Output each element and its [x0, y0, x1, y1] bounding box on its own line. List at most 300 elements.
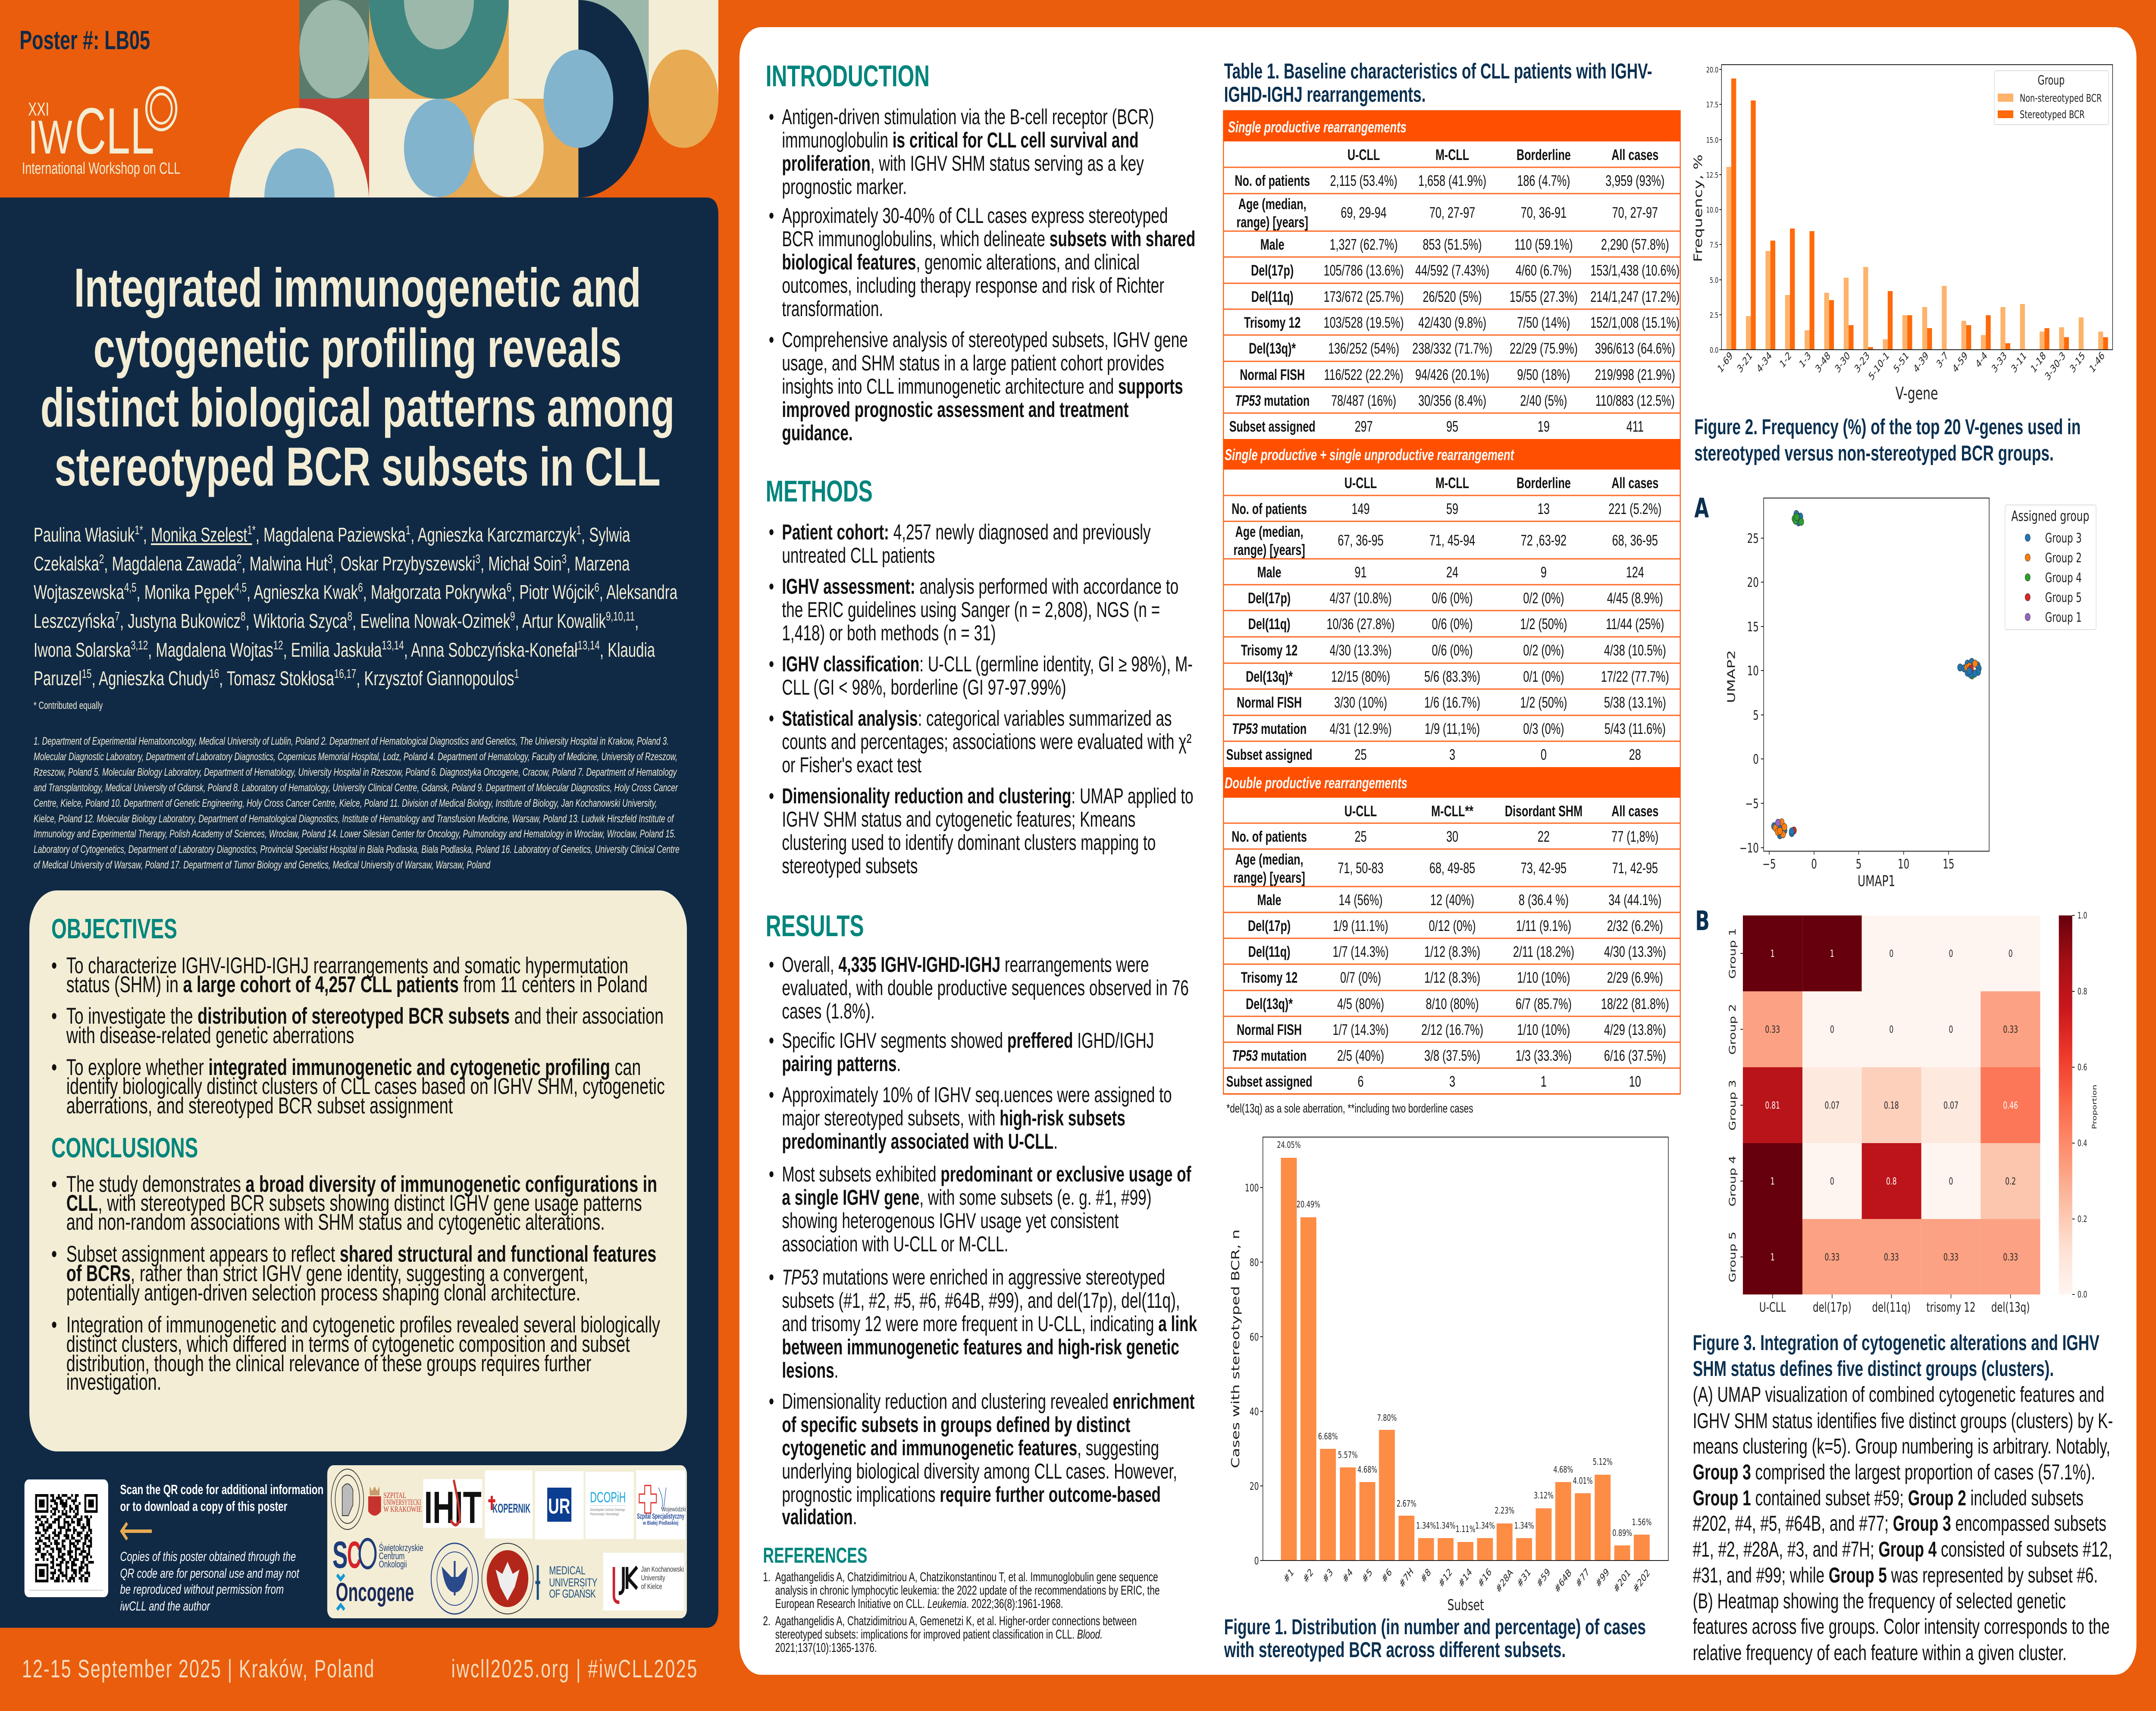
authors: , Agnieszka Chudy — [91, 667, 210, 689]
table section: single productive + single unproductive: 4/45 (8.9%) — [1607, 589, 1663, 607]
table section: single productive + single unproductive: 3/30 (10%) — [1334, 694, 1387, 711]
table section: double productive: 4/5 (80%) — [1337, 995, 1384, 1012]
table section: double productive: 1/12 (8.3%) — [1424, 943, 1480, 960]
cell values: 0.07 — [1825, 1100, 1839, 1111]
table section: double productive: Normal FISH — [1237, 1021, 1302, 1038]
introduction text: • — [769, 204, 774, 228]
table section: double productive: 4/30 (13.3%) — [1604, 943, 1666, 960]
reference list: Agathangelidis A, Chatzidimitriou A, Gemenetzi K, et al. Higher-order connections between — [775, 1614, 1137, 1628]
introduction text: Approximately 30-40% of CLL cases express stereotyped — [782, 204, 1168, 228]
chart: UMAP scatter: 0 — [1811, 857, 1817, 872]
affiliations: of Medical University of Warsaw, Poland 17. Department of Tumor Biology and Genetics, Medical University of Warsaw, Warsaw, Poland — [34, 859, 491, 871]
y axis ticks: 100 — [1245, 1182, 1259, 1194]
color bar: Proportion — [2091, 1084, 2098, 1129]
table section: single productive + single unproductive: Borderline — [1517, 474, 1571, 492]
color bar: 1.0 — [2078, 911, 2087, 921]
table section: double productive: M-CLL** — [1431, 802, 1473, 820]
title: distinct biological patterns among — [41, 377, 674, 439]
chart: UMAP scatter: 5 — [1856, 857, 1861, 872]
table section: single productive + single unproductive: 1/6 (16.7%) — [1424, 694, 1480, 711]
y axis title: Cases with stereotyped BCR, n — [1229, 1229, 1242, 1468]
cell values: 0 — [2009, 948, 2013, 959]
logo: IHIT: IHIT — [424, 1483, 482, 1533]
authors: 1 — [514, 667, 519, 681]
x axis ticks: #5 — [1360, 1566, 1374, 1585]
color bar: 0.4 — [2078, 1139, 2087, 1149]
authors: 13,14 — [382, 639, 404, 652]
results text: pairing patterns. — [782, 1052, 901, 1076]
x axis ticks: 3-23 — [1853, 349, 1871, 376]
table section: single productive: 3,959 (93%) — [1605, 172, 1664, 189]
x axis ticks: 4-34 — [1755, 349, 1774, 376]
table section: single productive + single unproductive: M-CLL — [1435, 474, 1469, 492]
table section: single productive: 297 — [1355, 418, 1373, 435]
authors: 15 — [82, 667, 91, 681]
legend: Group 2 — [2045, 551, 2082, 566]
table section: double productive: 10 — [1629, 1073, 1641, 1090]
percent labels — [1277, 1141, 1651, 1539]
results text: Overall, 4,335 IGHV-IGHD-IGHJ rearrangements were — [782, 953, 1149, 977]
authors: 4,5 — [234, 581, 247, 595]
results text: a single IGHV gene, with some subsets (e. g. #1, #99) — [782, 1186, 1151, 1210]
x axis ticks: #7H — [1398, 1566, 1415, 1590]
table section: single productive: No. of patients — [1235, 172, 1310, 189]
affiliations: Centre, Kielce, Poland 10. Department of Genetic Engineering, Holy Cross Cancer Centre, Kielce, Poland 11. Division of Medical Biology, Institute of Biology, Jan Kochanowski University, — [34, 797, 657, 809]
methods text: IGHV SHM status and cytogenetic features; Kmeans — [782, 808, 1135, 832]
x axis ticks: 5-51 — [1892, 349, 1911, 376]
x axis ticks: 3-11 — [2010, 349, 2028, 376]
authors: , Marzena — [567, 552, 630, 575]
logo: iwCLL: IW — [28, 111, 72, 164]
y axis ticks: 7.5 — [1710, 241, 1718, 250]
column labels: del(17p) — [1813, 1300, 1852, 1315]
objectives list: • — [51, 953, 57, 978]
color bar: 0.8 — [2078, 987, 2087, 997]
axis labels: 25 — [1747, 531, 1759, 546]
results text: major stereotyped subsets, with high-risk subsets — [782, 1106, 1125, 1131]
table section: single productive: Age (median, — [1238, 195, 1307, 213]
copyright note: iwCLL and the author — [120, 1598, 210, 1614]
methods text: IGHV assessment: analysis performed with accordance to — [782, 575, 1178, 599]
authors: Iwona Solarska — [34, 639, 131, 661]
x axis ticks: #4 — [1341, 1566, 1354, 1585]
results text: association with U-CLL or M-CLL. — [782, 1232, 1008, 1257]
table section: single productive: 78/487 (16%) — [1331, 392, 1396, 409]
table section: single productive + single unproductive: 91 — [1354, 564, 1366, 581]
results text — [769, 953, 1197, 1529]
table section: double productive: 12 (40%) — [1430, 891, 1474, 909]
authors: 6 — [507, 581, 511, 595]
objectives list: status (SHM) in a large cohort of 4,257 CLL patients from 11 centers in Poland — [66, 971, 648, 997]
logo: Szpital Uniwersytecki: UNIWERSYTECKI — [383, 1498, 421, 1507]
icon: arrow — [122, 1523, 152, 1539]
percent labels: 1.34% — [1475, 1521, 1495, 1531]
table section: single productive: 116/522 (22.2%) — [1324, 366, 1404, 383]
logo: UJK: Jan Kochanowski — [641, 1565, 684, 1574]
table section: single productive + single unproductive: 0 — [1541, 746, 1547, 763]
table section: single productive: 110 (59.1%) — [1514, 236, 1573, 253]
authors: 9 — [510, 610, 515, 624]
y axis ticks: 15.0 — [1706, 136, 1718, 145]
table section: double productive: 2/5 (40%) — [1337, 1047, 1384, 1064]
authors: 2 — [237, 552, 241, 566]
table section: single productive: 19 — [1538, 418, 1550, 435]
cell values: 0 — [1830, 1176, 1834, 1187]
x axis title: V-gene — [1896, 384, 1938, 404]
x axis ticks: #31 — [1515, 1566, 1532, 1590]
title: Integrated immunogenetic and — [74, 257, 641, 319]
table section: double productive: 34 (44.1%) — [1608, 891, 1661, 909]
table section: single productive + single unproductive: 13 — [1538, 500, 1550, 517]
logo: Medical University of Gdansk: MEDICAL — [549, 1564, 586, 1577]
authors: 1 — [406, 523, 411, 537]
table section: single productive: 153/1,438 (10.6%) — [1590, 262, 1680, 279]
table section: double productive: 3/8 (37.5%) — [1424, 1047, 1480, 1064]
logo: UJK: of Kielce — [641, 1583, 662, 1591]
results text: predominantly associated with U-CLL. — [782, 1130, 1058, 1154]
legend: Assigned group — [2011, 508, 2089, 524]
x axis ticks: #77 — [1574, 1566, 1591, 1590]
table section: double productive: 6 — [1357, 1073, 1363, 1090]
table section: double productive: Del(17p) — [1248, 917, 1291, 934]
objectives list: To investigate the distribution of stereotyped BCR subsets and their association — [66, 1003, 664, 1029]
logo: DCOPiH: Pulmonologii i Hematologii — [590, 1513, 619, 1516]
chart: UMAP scatter: 15 — [1943, 857, 1954, 872]
table section: double productive: Disordant SHM — [1505, 802, 1583, 820]
percent labels: 4.68% — [1553, 1465, 1573, 1475]
y axis ticks: 2.5 — [1710, 311, 1718, 320]
authors: 9,10,11 — [606, 610, 635, 624]
introduction text: proliferation, with IGHV SHM status serving as a key — [782, 152, 1144, 176]
results text: and trisomy 12 were more frequent in U-CLL, indicating a link — [782, 1312, 1197, 1336]
x axis ticks: #8 — [1419, 1566, 1432, 1585]
table section: double productive: 4/29 (13.8%) — [1604, 1021, 1666, 1038]
x axis ticks: 4-59 — [1951, 349, 1970, 376]
table section: single productive: U-CLL — [1348, 146, 1380, 163]
table section: double productive: 30 — [1446, 828, 1458, 845]
cell values: 0 — [1949, 948, 1953, 959]
authors: , Klaudia — [600, 639, 655, 661]
table section: single productive: 70, 36-91 — [1521, 204, 1567, 221]
table section: single productive + single unproductive: range) [years] — [1233, 541, 1305, 558]
axis labels: 20 — [1747, 575, 1759, 590]
chart: UMAP scatter: UMAP1 — [1858, 873, 1895, 890]
logo: Medical University of Gdansk — [535, 1564, 598, 1600]
section: methods — [766, 474, 1194, 878]
table section: double productive: 71, 42-95 — [1612, 859, 1658, 877]
table section: single productive + single unproductive: 0/3 (0%) — [1523, 720, 1564, 737]
x axis ticks: #202 — [1631, 1567, 1651, 1595]
table section: single productive: Del(11q) — [1251, 288, 1294, 305]
table section: single productive: 853 (51.5%) — [1423, 236, 1482, 253]
x axis ticks: 3-21 — [1736, 349, 1754, 376]
logo: Szpital Specjalistyczny: Wojewódzki — [661, 1505, 686, 1513]
table section: single productive: 105/786 (13.6%) — [1324, 262, 1404, 279]
partner logos — [327, 1465, 687, 1618]
table section: single productive + single unproductive: 0/6 (0%) — [1432, 589, 1473, 607]
percent labels: 3.12% — [1534, 1491, 1554, 1501]
table section: single productive: 152/1,008 (15.1%) — [1590, 314, 1680, 331]
table section: single productive: Single productive rearrangements — [1228, 119, 1407, 136]
results text: validation. — [782, 1505, 857, 1529]
table section: single productive + single unproductive: Del(11q) — [1248, 615, 1291, 633]
table section: double productive: 22 — [1538, 828, 1550, 845]
y axis ticks — [1706, 66, 1718, 355]
table section: single productive: 136/252 (54%) — [1328, 340, 1399, 357]
table section: single productive: 2/40 (5%) — [1520, 392, 1567, 409]
section: references — [763, 1544, 1159, 1655]
table section: single productive + single unproductive — [1225, 446, 1669, 763]
objectives list: identify biologically distinct clusters of CLL cases based on IGHV SHM, cytogenetic — [66, 1073, 665, 1099]
table section: single productive + single unproductive: Subset assigned — [1226, 746, 1313, 763]
authors: 8 — [348, 610, 352, 624]
table section: single productive + single unproductive: All cases — [1611, 474, 1658, 492]
caption: figure 3: relative frequency of each feature within a given cluster. — [1693, 1641, 2067, 1665]
conclusions list: potentially antigen-driven selection process shaping clonal architecture. — [66, 1280, 580, 1306]
reference list: stereotyped subsets: implications for improved patient classification in CLL. Blood. — [775, 1628, 1103, 1642]
results text: Dimensionality reduction and clustering revealed enrichment — [782, 1390, 1194, 1414]
table section: double productive: 77 (1,8%) — [1611, 828, 1658, 845]
x axis ticks: #12 — [1437, 1566, 1454, 1590]
results text: prognostic implications require further outcome-based — [782, 1483, 1161, 1507]
row labels: Group 1 — [1727, 928, 1738, 979]
introduction text: BCR immunoglobulins, which delineate subsets with shared — [782, 227, 1195, 251]
objectives list: • — [51, 1003, 57, 1029]
x axis ticks: 4-4 — [1974, 349, 1989, 371]
conclusions list: investigation. — [66, 1369, 161, 1395]
caption: figure 3: features across five groups. Color intensity corresponds to the — [1693, 1615, 2110, 1639]
logo: medal — [331, 1469, 364, 1529]
chart: UMAP scatter: 10 — [1898, 857, 1909, 872]
caption: figure 3: #31, and #99; while Group 5 was represented by subset #6. — [1693, 1564, 2098, 1588]
authors: , Krzysztof Giannopoulos — [356, 667, 514, 689]
copyright note: QR code are for personal use and may not — [120, 1566, 300, 1581]
table section: double productive: Subset assigned — [1226, 1073, 1313, 1090]
y axis ticks: 12.5 — [1706, 171, 1718, 180]
authors: , — [635, 610, 639, 632]
methods text: CLL (GI < 98%, borderline (GI 97-97.99%) — [782, 676, 1066, 700]
table section: single productive + single unproductive: 59 — [1446, 500, 1458, 517]
x axis ticks: #201 — [1612, 1567, 1632, 1595]
x axis title: Subset — [1448, 1597, 1484, 1614]
table title — [1224, 60, 1652, 107]
table: baseline characteristics — [1223, 111, 1680, 1094]
results text: • — [769, 1163, 774, 1187]
table section: single productive + single unproductive: 0/6 (0%) — [1432, 615, 1473, 633]
introduction text: Antigen-driven stimulation via the B-cell receptor (BCR) — [782, 105, 1154, 129]
table section: double productive: Age (median, — [1235, 851, 1304, 868]
table section: single productive: 69, 29-94 — [1341, 204, 1387, 221]
axis labels — [1739, 531, 1759, 856]
table section: single productive + single unproductive: U-CLL — [1344, 474, 1377, 492]
axis labels: −10 — [1739, 841, 1759, 856]
title: stereotyped BCR subsets in CLL — [54, 436, 661, 498]
x axis ticks: 1-3 — [1798, 349, 1813, 371]
introduction text: insights into CLL immunogenetic architecture and supports — [782, 375, 1183, 399]
logo: UR: UR — [548, 1495, 570, 1519]
bars: non-stereotyped — [1727, 167, 2103, 350]
table section: double productive: 1 — [1541, 1073, 1547, 1090]
authors: , Magdalena Zawada — [104, 552, 237, 575]
logo: Oncogene: Oncogene — [336, 1578, 414, 1607]
results text: TP53 mutations were enriched in aggressive stereotyped — [782, 1266, 1165, 1290]
authors: , Monika Szelest — [143, 523, 247, 546]
affiliations: and Transplantology, Medical University of Gdansk, Poland 8. Laboratory of Hematology, University Clinical Centre, Gdansk, Poland 9. Department of Molecular Diagnostics, Holy Cross Cancer — [34, 782, 678, 794]
methods text: clustering used to identify dominant clusters mapping to — [782, 831, 1156, 855]
caption: figure 3: #1, #2, #28A, #3, and #7H; Group 4 consisted of subsets #12, — [1693, 1538, 2112, 1562]
table section: double productive: 8/10 (80%) — [1426, 995, 1479, 1012]
axis labels: 15 — [1747, 620, 1759, 635]
methods text — [769, 520, 1194, 878]
table section: single productive: 1,327 (62.7%) — [1330, 236, 1398, 253]
heading: methods: METHODS — [766, 474, 873, 508]
objectives list: To characterize IGHV-IGHD-IGHJ rearrangements and somatic hypermutation — [66, 953, 628, 978]
caption: figure 2 — [1694, 415, 2081, 466]
table section: single productive + single unproductive: 28 — [1629, 746, 1641, 763]
authors: , Agnieszka Kwak — [247, 581, 358, 603]
legend: Group — [2038, 73, 2065, 88]
introduction text: biological features, genomic alterations, and clinical — [782, 251, 1140, 275]
authors: , Sylwia — [581, 523, 630, 546]
cell values: 1 — [1830, 948, 1834, 959]
logo: SCO — [332, 1534, 423, 1576]
logo: SCO: Świętokrzyskie — [379, 1542, 423, 1554]
table section: double productive: Male — [1257, 891, 1282, 909]
table section: double productive: Trisomy 12 — [1241, 969, 1297, 986]
caption: figure 1 — [1224, 1615, 1646, 1662]
table frame and section bars — [1223, 111, 1680, 1094]
legend: Group 1 — [2045, 610, 2082, 625]
objectives list: • — [51, 1054, 57, 1080]
cell values: 0.33 — [1765, 1024, 1780, 1035]
table section: double productive: 73, 42-95 — [1521, 859, 1567, 877]
table section: single productive: 2,290 (57.8%) — [1601, 236, 1669, 253]
table section: single productive: Subset assigned — [1229, 418, 1316, 435]
panel label B: B — [1695, 905, 1710, 937]
logo: Szpital Specjalistyczny: Szpital Specjalistyczny — [637, 1512, 684, 1521]
methods text: the ERIC guidelines using Sanger (n = 2,808), NGS (n = — [782, 598, 1160, 622]
authors: Wojtaszewska — [34, 581, 124, 603]
heading: introduction: INTRODUCTION — [766, 59, 930, 93]
x axis ticks: #3 — [1321, 1566, 1335, 1585]
conclusions list: Integration of immunogenetic and cytogenetic profiles revealed several biologically — [66, 1312, 660, 1338]
y axis ticks: 40 — [1250, 1406, 1259, 1418]
table section: double productive: range) [years] — [1233, 869, 1305, 886]
x axis ticks: 1-18 — [2029, 349, 2048, 376]
introduction text: outcomes, including therapy response and risk of Richter — [782, 274, 1164, 298]
table section: single productive: 94/426 (20.1%) — [1415, 366, 1489, 383]
table section: double productive: 18/22 (81.8%) — [1601, 995, 1669, 1012]
x axis ticks — [1282, 1566, 1651, 1595]
table section: single productive + single unproductive: 0/2 (0%) — [1523, 642, 1564, 659]
caption: figure 3: IGHV SHM status identifies five distinct groups (clusters) by K- — [1693, 1409, 2113, 1433]
authors: 1* — [247, 523, 256, 537]
table section: double productive: 1/7 (14.3%) — [1332, 943, 1388, 960]
x axis ticks: #14 — [1457, 1566, 1474, 1590]
results text: • — [769, 1390, 774, 1414]
table section: double productive: Del(11q) — [1248, 943, 1291, 960]
reference list: 2. — [763, 1614, 771, 1628]
table section: double productive: 1/7 (14.3%) — [1332, 1021, 1388, 1038]
cell values: 0.33 — [1825, 1252, 1839, 1263]
table section: double productive: 3 — [1449, 1073, 1455, 1090]
logo: Warsaw medical university — [482, 1543, 533, 1614]
legend — [1994, 71, 2109, 125]
x axis ticks: 1-46 — [2088, 349, 2106, 376]
authors: , Emilia Jaskuła — [283, 639, 382, 661]
table section: single productive + single unproductive: Normal FISH — [1237, 694, 1302, 711]
table section: single productive + single unproductive: 149 — [1351, 500, 1369, 517]
affiliations: Laboratory of Cytogenetics, Department of Laboratory Diagnostics, Provincial Specialist Hospital in Biala Podlaska, Biala Podlaska, Poland 16. Laboratory of Genetics, University Clinical Centre — [34, 843, 680, 856]
cell values: 0.33 — [2003, 1024, 2018, 1035]
x axis ticks: 3-30-3 — [2043, 349, 2067, 383]
axis labels: 0 — [1753, 752, 1759, 767]
legend: Stereotyped BCR — [2020, 109, 2085, 121]
authors: 6 — [358, 581, 363, 595]
legend: Group 4 — [2045, 570, 2082, 586]
results text: • — [769, 1029, 774, 1053]
table section: single productive + single unproductive: 71, 45-94 — [1429, 532, 1475, 549]
objectives list: aberrations, and stereotyped BCR subset assignment — [66, 1093, 453, 1119]
legend: Group 3 — [2045, 531, 2082, 546]
table section: single productive: 396/613 (64.6%) — [1595, 340, 1675, 357]
y axis ticks: 10.0 — [1706, 206, 1718, 215]
table section: double productive: 68, 49-85 — [1429, 859, 1475, 877]
x axis ticks: #1 — [1282, 1566, 1295, 1585]
methods text: untreated CLL patients — [782, 544, 935, 568]
cell values: 0.81 — [1765, 1100, 1780, 1111]
affiliations: Kielce, Poland 12. Molecular Biology Laboratory, Department of Hematological Diagnostics, Institute of Hematology and Transfusion Medicine, Warsaw, Poland 13. Ludwik Hirszfeld Institute of — [34, 813, 674, 825]
conclusions list: • — [51, 1241, 57, 1267]
color bar: 0.0 — [2078, 1290, 2087, 1300]
percent labels: 5.57% — [1338, 1451, 1358, 1460]
x axis ticks: 3-7 — [1935, 349, 1950, 371]
objectives list: To explore whether integrated immunogenetic and cytogenetic profiling can — [66, 1054, 641, 1080]
x axis ticks: #16 — [1476, 1566, 1493, 1590]
percent labels: 24.05% — [1277, 1141, 1300, 1150]
qr instructions: or to download a copy of this poster — [120, 1498, 288, 1514]
authors: , Malwina Hut — [241, 552, 328, 575]
color bar: 0.2 — [2078, 1215, 2087, 1225]
methods text: or Fisher's exact test — [782, 753, 921, 777]
table section: double productive: 8 (36.4 %) — [1519, 891, 1569, 909]
authors: 4,5 — [124, 581, 136, 595]
table section: single productive + single unproductive: 1/2 (50%) — [1520, 615, 1567, 633]
percent labels: 1.34% — [1436, 1521, 1455, 1531]
table section: double productive: 0/12 (0%) — [1429, 917, 1476, 934]
table section: single productive + single unproductive: 25 — [1354, 746, 1366, 763]
table section: single productive: 30/356 (8.4%) — [1418, 392, 1486, 409]
results text: Approximately 10% of IGHV seq.uences were assigned to — [782, 1083, 1172, 1107]
table section: single productive + single unproductive: Age (median, — [1235, 523, 1304, 540]
authors: 1 — [576, 523, 581, 537]
authors: , Michał Soin — [480, 552, 562, 575]
affiliations: Immunology and Experimental Therapy, Polish Academy of Sciences, Wroclaw, Poland 14. Lower Silesian Center for Oncology, Pulmonology and Hematology in Wroclaw, Wroclaw, Poland 15. — [34, 828, 676, 840]
authors — [34, 523, 678, 711]
logo: Szpital Uniwersytecki — [368, 1486, 422, 1516]
caption: figure 3: Group 3 comprised the largest proportion of cases (57.1%). — [1693, 1460, 2095, 1485]
percent labels: 1.34% — [1416, 1521, 1436, 1531]
results text: between immunogenetic features and high-risk genetic — [782, 1335, 1179, 1360]
logo: iwCLL: International Workshop on CLL — [22, 159, 180, 177]
percent labels: 20.49% — [1297, 1200, 1320, 1210]
table section: single productive: Male — [1260, 236, 1285, 253]
table section: single productive: 4/60 (6.7%) — [1516, 262, 1572, 279]
objectives list — [51, 953, 665, 1119]
heading: references: REFERENCES — [763, 1544, 868, 1568]
logo: Szpital Specjalistyczny — [636, 1470, 686, 1539]
caption: figure 1: Figure 1. Distribution (in number and percentage) of cases — [1224, 1615, 1646, 1639]
